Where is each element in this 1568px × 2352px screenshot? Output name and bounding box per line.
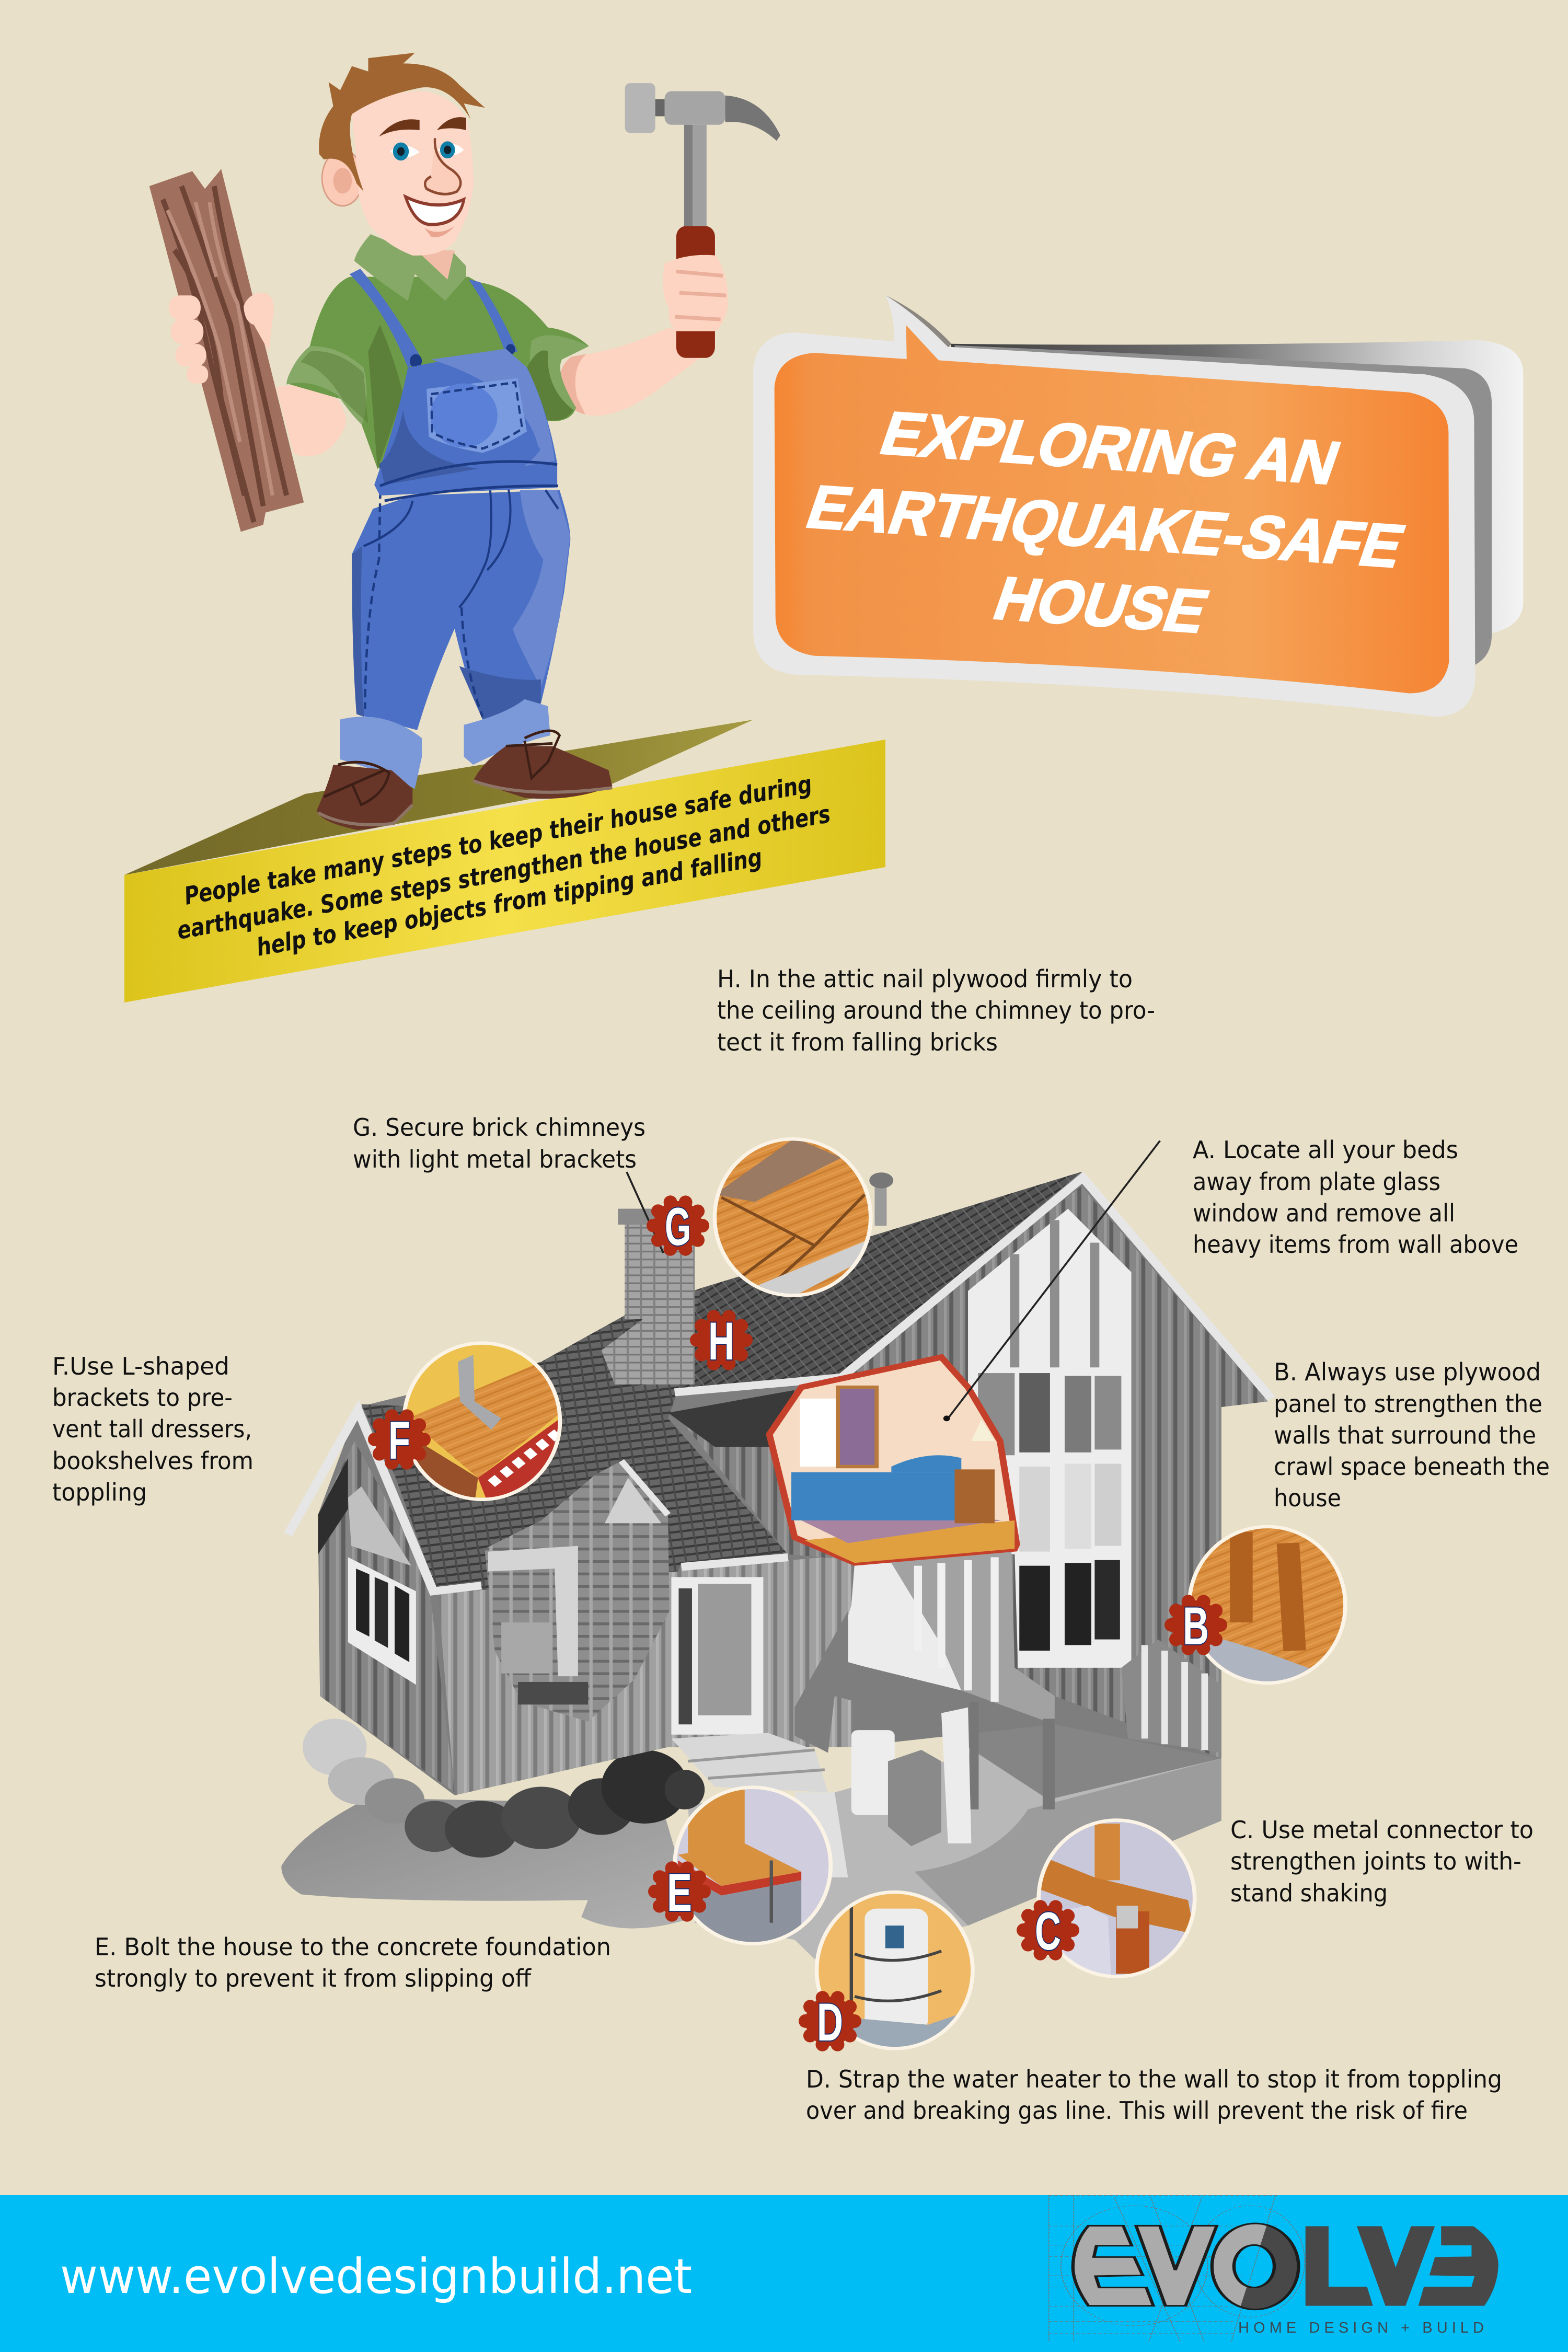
text: step A: window and remove all bbox=[1193, 1199, 1455, 1227]
right porch rail bbox=[1121, 1640, 1221, 1753]
circle border E bbox=[675, 1788, 831, 1944]
title: EARTHQUAKE-SAFE bbox=[798, 473, 1413, 580]
badge E: E bbox=[667, 1863, 692, 1922]
text: step B: crawl space beneath the bbox=[1274, 1452, 1550, 1481]
text: step A: A. Locate all your beds bbox=[1193, 1136, 1458, 1164]
detail circle: B plywood panel bbox=[1192, 1528, 1343, 1681]
large gable wall bbox=[841, 1186, 1268, 1758]
text: step B bbox=[1274, 1358, 1550, 1512]
text: step A bbox=[1193, 1136, 1518, 1259]
text: step C bbox=[1230, 1816, 1534, 1907]
pocket bbox=[426, 378, 527, 453]
text: step H: tect it from falling bricks bbox=[717, 1028, 998, 1056]
circle border B bbox=[1189, 1527, 1345, 1683]
roof: main right bbox=[675, 1172, 1081, 1390]
back grey panel bbox=[955, 345, 1492, 665]
banner text: help to keep objects from tipping and falling bbox=[254, 843, 765, 962]
badge F bbox=[375, 1411, 424, 1470]
bib bbox=[374, 349, 557, 495]
left hand bbox=[169, 293, 274, 384]
hammer bbox=[625, 83, 780, 358]
badge G: G bbox=[665, 1197, 691, 1256]
text: step G bbox=[353, 1113, 645, 1173]
back page with gradient bbox=[950, 340, 1523, 633]
text: step E: strongly to prevent it from slipping off bbox=[95, 1964, 532, 1992]
shoes bbox=[317, 731, 612, 830]
title bbox=[798, 399, 1413, 645]
circle border G bbox=[714, 1139, 871, 1296]
title: EXPLORING AN bbox=[872, 399, 1348, 497]
text: step E: E. Bolt the house to the concrete foundation bbox=[95, 1933, 611, 1961]
hair bbox=[319, 53, 485, 191]
gable trim bbox=[288, 1178, 1271, 1591]
front steps bbox=[671, 1733, 848, 1877]
lower framing cutaway bbox=[794, 1546, 1055, 1809]
trouser cuffs bbox=[340, 717, 422, 789]
text: step B: B. Always use plywood bbox=[1274, 1358, 1541, 1386]
text: step B: panel to strengthen the bbox=[1274, 1390, 1542, 1418]
orange inner bubble bbox=[775, 325, 1449, 693]
text: step F bbox=[52, 1352, 253, 1506]
roof: upper ridge by chimney bbox=[541, 1288, 701, 1419]
detail circle: E foundation bolt bbox=[676, 1789, 829, 1942]
front wall bbox=[438, 1554, 851, 1795]
house illustration bbox=[281, 1135, 1355, 2053]
big window bbox=[968, 1209, 1132, 1668]
speech bubble title panel bbox=[753, 295, 1523, 717]
banner text: People take many steps to keep their house safe during bbox=[182, 770, 814, 911]
text: step G: with light metal brackets bbox=[353, 1145, 637, 1173]
logo letters EV bbox=[1073, 2226, 1217, 2306]
banner text: earthquake. Some steps strengthen the house and others bbox=[175, 800, 833, 946]
text: step D: over and breaking gas line. This will prevent the risk of fire bbox=[806, 2096, 1468, 2125]
text: step H bbox=[717, 965, 1155, 1056]
text: step B: house bbox=[1274, 1484, 1341, 1512]
footer url: www.evolvedesignbuild.net bbox=[60, 2249, 692, 2304]
nose bbox=[425, 138, 460, 194]
shrubs bbox=[303, 1719, 705, 1858]
left wing side wall bbox=[318, 1441, 455, 1792]
leader line: G to chimney bbox=[627, 1172, 663, 1253]
badge F: F bbox=[388, 1411, 410, 1470]
text: step A: away from plate glass bbox=[1193, 1168, 1440, 1196]
leader line: A to bedroom bbox=[943, 1141, 1160, 1421]
detail circle: D water heater bbox=[811, 1889, 978, 2053]
ear bbox=[322, 151, 363, 206]
logo construction grid bbox=[1049, 2196, 1305, 2342]
circle border F bbox=[404, 1343, 560, 1500]
text: step C: C. Use metal connector to bbox=[1230, 1816, 1534, 1844]
ground shadow bbox=[281, 1798, 695, 1929]
badge H: H bbox=[708, 1311, 734, 1371]
logo letter O bbox=[1212, 2223, 1298, 2310]
right fist bbox=[663, 255, 728, 331]
text: step D: D. Strap the water heater to the wall to stop it from toppling bbox=[806, 2065, 1502, 2093]
roof: left wing bbox=[361, 1313, 788, 1594]
text: step C: stand shaking bbox=[1230, 1879, 1388, 1907]
house silhouette backing bbox=[318, 1172, 1271, 1795]
text: step D bbox=[806, 2065, 1502, 2125]
badge D: D bbox=[817, 1992, 843, 2052]
text: step F: bookshelves from bbox=[52, 1447, 253, 1475]
right sleeve cuff bbox=[530, 335, 589, 420]
banner: intro text bbox=[124, 740, 885, 1002]
text: step C: strengthen joints to with- bbox=[1230, 1847, 1521, 1875]
badge B: B bbox=[1183, 1596, 1209, 1656]
character: carpenter with plank and hammer bbox=[149, 53, 780, 830]
left wing window bbox=[348, 1486, 416, 1685]
logo tagline: HOME DESIGN + BUILD bbox=[1238, 2320, 1484, 2336]
text: step F: brackets to pre- bbox=[52, 1383, 233, 1412]
outer pale bubble bbox=[753, 295, 1475, 717]
chimney bbox=[602, 1172, 893, 1385]
text: step F: vent tall dressers, bbox=[52, 1415, 252, 1443]
text: step H: the ceiling around the chimney to pro- bbox=[717, 996, 1155, 1024]
text: step F: toppling bbox=[52, 1478, 147, 1506]
eyebrows and eyes bbox=[379, 117, 466, 160]
front door bbox=[671, 1577, 763, 1735]
badge C: C bbox=[1035, 1901, 1061, 1961]
logo: EVOLVE home design + build bbox=[1049, 2196, 1498, 2342]
detail circle: G plywood around chimney bbox=[717, 1140, 869, 1294]
text: step E bbox=[95, 1933, 611, 1992]
trousers bbox=[352, 490, 570, 730]
detail circle: C connectors bbox=[1041, 1822, 1193, 1975]
title: HOUSE bbox=[985, 564, 1217, 645]
left sleeve cuff bbox=[286, 346, 367, 425]
neck and collar bbox=[412, 250, 455, 301]
circle border C bbox=[1039, 1820, 1195, 1977]
text: step A: heavy items from wall above bbox=[1193, 1230, 1518, 1259]
smile bbox=[406, 197, 464, 225]
text: step H: H. In the attic nail plywood firmly to bbox=[717, 965, 1133, 993]
text: step G: G. Secure brick chimneys bbox=[353, 1113, 645, 1142]
bedroom cutaway bbox=[769, 1357, 1017, 1563]
detail circle: F bracket bbox=[407, 1344, 558, 1498]
logo letters LV3 bbox=[1306, 2226, 1498, 2306]
text: step F: F.Use L-shaped bbox=[52, 1352, 229, 1380]
plank bbox=[149, 169, 304, 532]
text: step B: walls that surround the bbox=[1274, 1421, 1536, 1449]
left cutaway room bbox=[485, 1461, 670, 1722]
left arm bbox=[276, 385, 346, 456]
floor shadow under the man bbox=[124, 720, 753, 875]
circle border D bbox=[816, 1892, 973, 2048]
shirt bbox=[286, 277, 589, 469]
right arm bbox=[559, 328, 716, 416]
water heater and furnace bbox=[851, 1708, 971, 1846]
face bbox=[352, 91, 474, 256]
basement floor bbox=[688, 1742, 1221, 1963]
overall straps bbox=[350, 269, 422, 367]
footer bar bbox=[0, 2195, 1568, 2352]
